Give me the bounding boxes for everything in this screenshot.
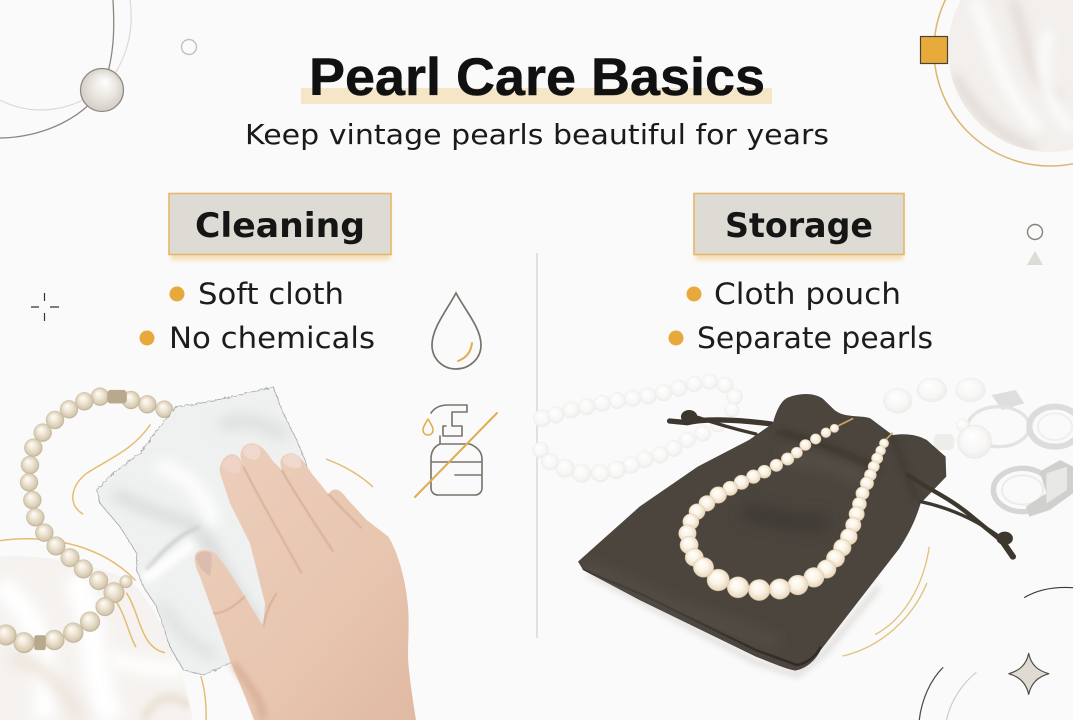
nails [223, 456, 240, 473]
decoration: top-right marble circle [934, 0, 1073, 166]
marble swatch [0, 550, 200, 720]
panel: cleaning heading: Cleaning [195, 206, 365, 246]
cleaning list: No chemicals [169, 321, 375, 355]
panel: storage heading: Storage [725, 206, 873, 246]
faded jewelry and rings [883, 378, 1073, 517]
decoration: ring and triangle right [1027, 224, 1043, 265]
storage scene [532, 374, 1073, 720]
hand [195, 443, 416, 720]
decoration: crosshair [31, 293, 59, 321]
corner arcs [919, 587, 1073, 720]
faded pearl strand [532, 374, 743, 483]
title: Pearl Care Basics [309, 48, 765, 107]
icon: crossed-out soap bottle [415, 405, 497, 497]
cleaning list: Soft cloth [198, 277, 344, 311]
right drawstring [908, 475, 1013, 557]
subtitle: Keep vintage pearls beautiful for years [245, 118, 829, 151]
icon: water drop [432, 293, 481, 369]
decoration: top-left pearl with arcs [0, 0, 131, 138]
dark velvet pouch [578, 394, 946, 671]
decoration: gold square [920, 36, 948, 64]
clasp [831, 418, 893, 443]
white cloth [97, 387, 320, 675]
panel: storage heading [694, 194, 904, 260]
pearl bracelet [0, 388, 173, 653]
storage list [668, 277, 933, 355]
storage list: Cloth pouch [714, 277, 901, 311]
storage list: Separate pearls [697, 321, 933, 355]
panel: cleaning heading [169, 194, 391, 260]
decoration: small ring top [182, 40, 196, 54]
pearl necklace [679, 424, 889, 601]
gold swirls [0, 425, 373, 720]
decoration: four-point star [1009, 653, 1049, 694]
divider [536, 253, 538, 638]
left drawstring [670, 410, 771, 434]
cleaning list [140, 277, 375, 355]
pouch shadow [588, 573, 879, 675]
cleaning scene [0, 387, 416, 720]
gold swirls [843, 547, 929, 656]
